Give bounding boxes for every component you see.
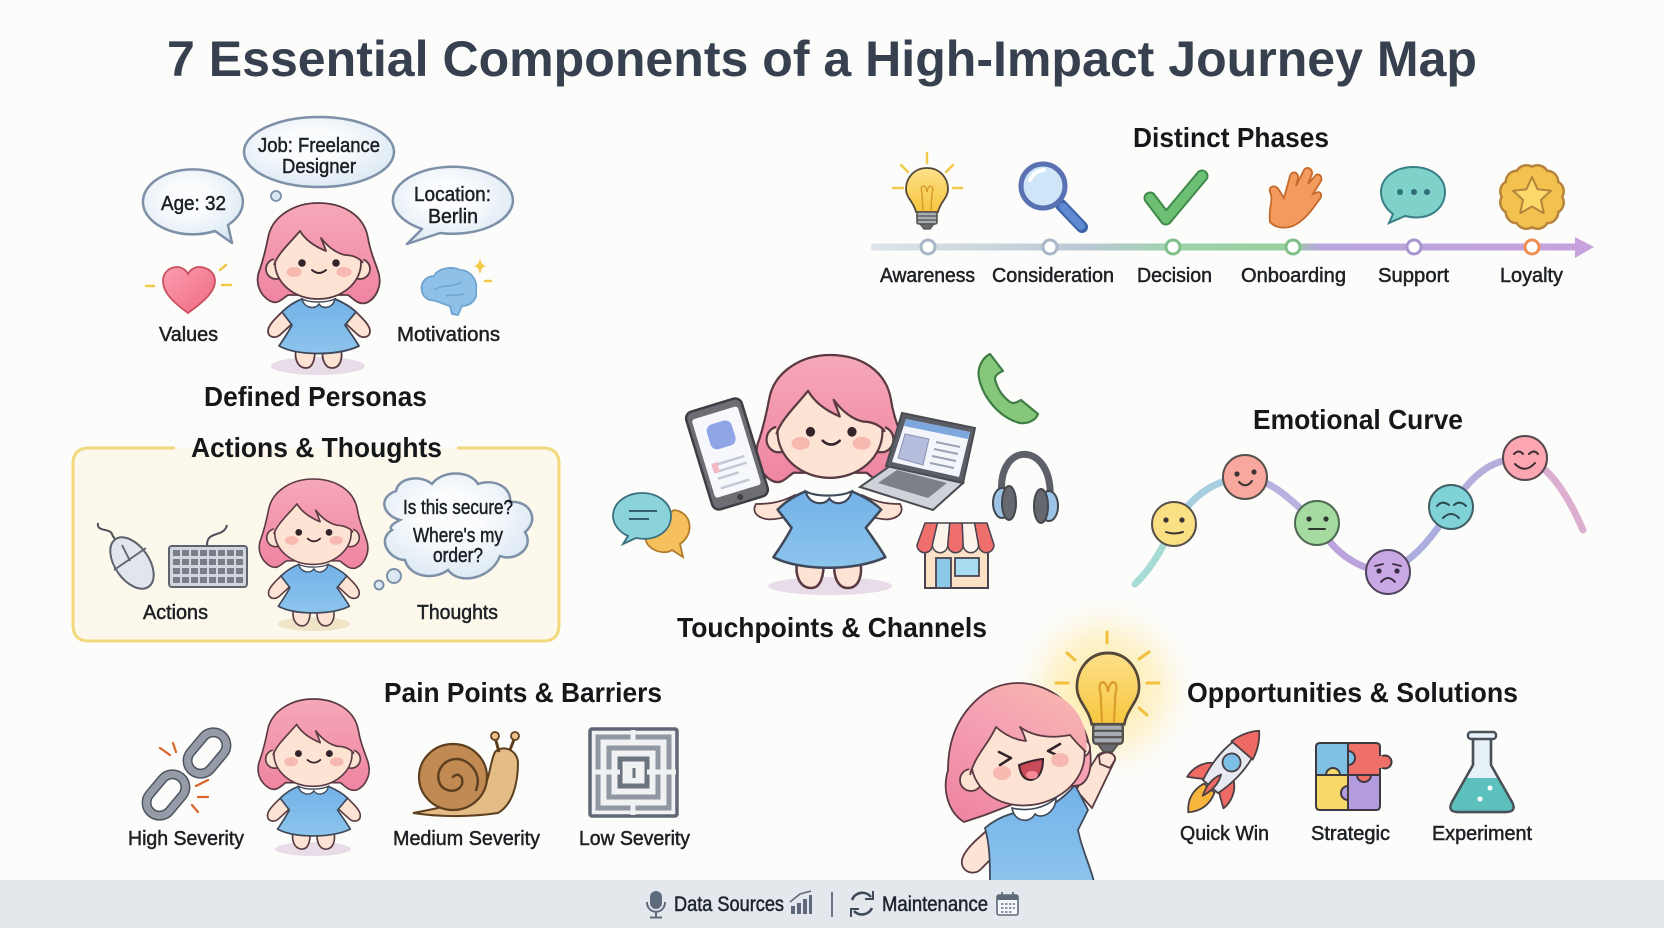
face: frustrated [1429, 485, 1473, 529]
bubble: age [143, 169, 243, 243]
character: touchpoints [754, 355, 905, 595]
bubble: location: Berlin [428, 206, 478, 228]
icon: microphone [647, 891, 665, 918]
icon: puzzle [1316, 743, 1392, 810]
icon: magnifier [1021, 164, 1082, 227]
bubble: job [244, 117, 394, 201]
thought cloud: Is this secure? [403, 497, 513, 519]
phase labels [880, 265, 1563, 287]
icon: heart [146, 265, 231, 313]
icon: brain [422, 258, 491, 315]
curve line [1135, 458, 1583, 584]
icon: chat bubble [1381, 167, 1445, 223]
title: 7 Essential Components of a High-Impact Journey Map [167, 31, 1477, 87]
face: happy [1223, 455, 1267, 499]
icon: chat bubbles [613, 493, 690, 557]
thought cloud: Where's my [413, 525, 503, 547]
face: neutral [1295, 501, 1339, 545]
character: persona [258, 699, 369, 856]
heading: actions and thoughts: Actions & Thoughts [191, 432, 442, 463]
panel: touchpoints and channels [613, 354, 1058, 643]
solution labels: Quick Win [1180, 823, 1269, 845]
phase labels: Consideration [992, 265, 1114, 287]
icon: light bulb [893, 153, 962, 229]
label: thoughts: Thoughts [417, 602, 498, 624]
icon: phone handset [979, 354, 1038, 423]
icon: big light bulb [1056, 632, 1159, 768]
phase labels: Support [1378, 265, 1449, 287]
bubble: location: Location: [414, 184, 491, 206]
heading: pain points and barriers: Pain Points & Barriers [384, 677, 662, 708]
character: persona [258, 203, 380, 375]
face: sad [1366, 550, 1410, 594]
bubble: location [393, 167, 513, 244]
character: idea [946, 683, 1115, 882]
severity labels: High Severity [128, 828, 244, 850]
heading: distinct phases: Distinct Phases [1133, 122, 1329, 153]
phase labels: Awareness [880, 265, 975, 287]
bubble: job: Job: Freelance [258, 135, 380, 157]
solution labels: Strategic [1311, 823, 1390, 845]
icon: laptop [860, 413, 975, 510]
solution labels [1180, 823, 1532, 845]
panel: pain points and barriers [128, 677, 690, 856]
panel: opportunities and solutions [946, 602, 1532, 882]
icon: check mark [1150, 176, 1202, 219]
phase labels: Onboarding [1241, 265, 1346, 287]
panel: actions and thoughts [73, 432, 559, 641]
glow [1017, 602, 1193, 778]
icon: broken chain [141, 727, 232, 821]
panel: distinct phases [874, 122, 1594, 287]
severity labels: Low Severity [579, 828, 690, 850]
face: delighted [1503, 436, 1547, 480]
label: motivations: Motivations [397, 324, 500, 346]
heading: touchpoints and channels: Touchpoints & Channels [677, 612, 987, 643]
panel: defined personas [143, 117, 513, 412]
character: persona [259, 479, 368, 631]
phase labels: Decision [1137, 265, 1212, 287]
severity labels [128, 828, 690, 850]
thought cloud [374, 474, 532, 590]
icon: waving hand [1270, 168, 1321, 228]
icon: growth chart [790, 891, 812, 914]
icon: rocket [1170, 715, 1278, 828]
icon: keyboard [169, 525, 247, 587]
bubble: job: Designer [282, 156, 356, 178]
thought cloud: order? [433, 545, 483, 567]
icon: star badge [1496, 161, 1568, 233]
icon: calendar [997, 892, 1018, 915]
solution labels: Experiment [1432, 823, 1532, 845]
label: values: Values [159, 324, 218, 346]
text: maintenance: Maintenance [882, 893, 988, 916]
icon: snail [413, 732, 519, 816]
icon: smartphone [684, 397, 770, 511]
text: data sources: Data Sources [674, 893, 784, 916]
heading: emotional curve: Emotional Curve [1253, 404, 1463, 435]
frame border [73, 448, 559, 641]
label: actions: Actions [143, 602, 208, 624]
icon: maze [590, 729, 677, 816]
timeline arrow [874, 237, 1594, 258]
heading: opportunities and solutions: Opportunities & Solutions [1187, 677, 1518, 708]
icon: mouse [98, 523, 163, 597]
phase labels: Loyalty [1500, 265, 1563, 287]
panel frame [73, 448, 559, 641]
icon: headset [993, 454, 1058, 523]
icon: refresh [851, 891, 873, 917]
bubble: age: Age: 32 [161, 193, 226, 215]
severity labels: Medium Severity [393, 828, 540, 850]
footer band [0, 880, 1664, 928]
face: neutral smile [1152, 502, 1196, 546]
icon: flask [1450, 732, 1514, 812]
panel: emotional curve [1135, 404, 1583, 594]
icon: store [917, 523, 994, 588]
heading: defined personas: Defined Personas [204, 381, 427, 412]
divider [831, 892, 833, 917]
